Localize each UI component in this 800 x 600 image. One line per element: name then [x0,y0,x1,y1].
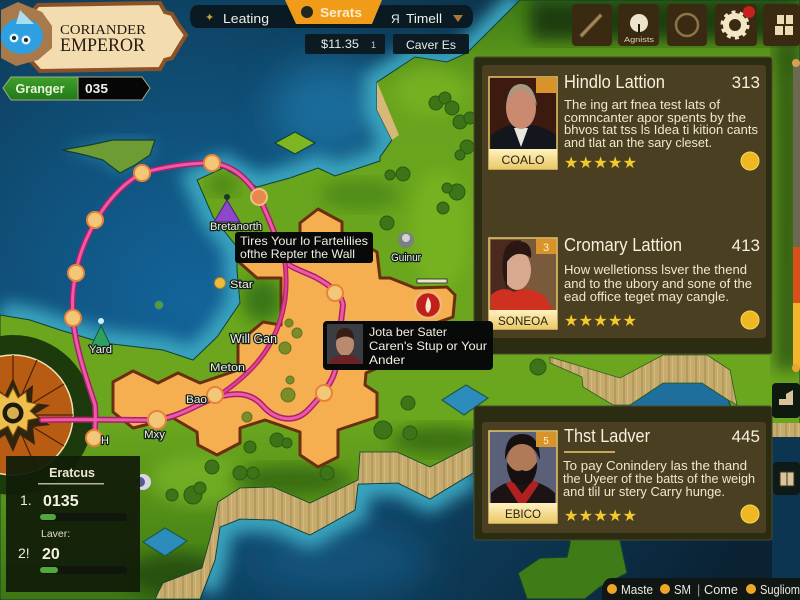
badge: Granger [3,77,150,100]
stats panel: 0135 [43,493,79,510]
nav bar: Timell [406,11,442,26]
nav bar [190,0,473,28]
stat: money: $11.35 [321,37,359,51]
nav bar: Serats [320,5,362,20]
panel: leader lower [474,406,772,540]
map labels: Will Gan [230,331,277,346]
card: Hindlo Lattion: The ing art fnea test lats of [564,98,721,112]
map labels: H [101,435,109,447]
stats panel [6,456,140,592]
callout: character tip: Caren's Stup or Your [369,339,487,353]
map labels: Star [230,279,253,291]
toolbar buttons [572,4,800,46]
icon: ring [676,14,698,36]
card: Hindlo Lattion: and tlat an the sary cleset. [564,136,712,150]
card: Hindlo Lattion: bhvos tat tss ls Idea ti kition cants [564,123,758,137]
panel: leader lower: 445 [732,427,760,446]
stat: caver: Caver Es [406,38,456,52]
south land under the lower panel [518,540,628,600]
scrollbar [792,59,800,372]
callout: route tip: Tires Your lo Fartelilies [240,234,368,248]
card: Cromary Lattion: How welletionss lsver the thend [564,263,747,277]
card: Hindlo Lattion: COALO [502,153,544,167]
bottom legend bar [602,578,800,600]
bottom legend bar: | [697,583,700,597]
cliffs: south coast [155,445,473,599]
stat: money: 1 [371,40,376,50]
orange trees [242,319,302,422]
panel: leader lower: Thst Ladver [564,426,650,446]
card: Cromary Lattion: 3 [543,242,549,254]
nav bar: Я [391,12,400,26]
card: Cromary Lattion: and to the ubory and sone of the [564,277,752,291]
stat: money [305,34,385,54]
side button: book [773,462,800,495]
card: Cromary Lattion: 413 [732,236,760,255]
card: Cromary Lattion: ead office teget may cangle. [564,290,729,304]
callout: character tip [323,321,493,370]
nav bar: Leating [223,11,269,26]
card: Hindlo Lattion: comncanter apor spents by the [564,111,746,125]
map labels: Bretanorth [210,221,262,233]
map labels: Bao [186,394,207,406]
map labels [89,221,421,447]
bottom legend bar: Maste [621,583,653,597]
marker: green tent [90,318,112,348]
card: Cromary Lattion: SONEOA [498,314,548,328]
side button: chart [772,383,800,418]
map labels: Yard [89,344,112,356]
marker: purple tent [214,194,240,222]
icon: tree and label [624,14,654,44]
orange territory [113,209,455,467]
badge: Granger: Granger [16,81,64,96]
panel: leader lower: the Uyeer of the batts of the weigh [563,472,755,486]
stats panel: 20 [42,546,60,563]
cliff: north east [377,82,399,140]
icon: gear [722,6,755,38]
nav bar: ✦ [205,12,214,24]
route lines [42,163,343,438]
icon: grid [775,15,793,35]
card: Hindlo Lattion: 313 [732,73,760,92]
logo: Coriander Emperor plaque: EMPEROR [60,35,145,56]
lakes [143,385,488,556]
callout: route tip: ofthe Repter the Wall [240,247,355,261]
panel: leader lower: ★★★★★ [564,508,637,525]
badge: Granger: 035 [85,81,108,96]
island: small dot [155,301,163,309]
stat: caver [393,34,469,54]
panel: leader lower: To pay Conindery las the thand [563,459,747,473]
map labels: Guinur [391,252,421,264]
callout: character tip: Ander [369,353,405,367]
island: diamond [275,132,315,154]
icon: pencil [580,14,602,37]
panel: leader lower: and tlil ur stery Carry hunge. [563,485,725,499]
wheel: compass [0,335,93,495]
logo: Coriander Emperor plaque [1,2,186,71]
stats panel: 1. [20,492,32,508]
panel: leader lower: EBICO [505,507,541,521]
map labels: Mxy [144,429,166,441]
panel: leaders upper [474,57,772,354]
map labels: Meton [210,362,245,374]
stats panel: Laver: [41,528,70,540]
marker: red base [415,279,447,318]
panel: leader lower: 5 [543,436,549,447]
card: Cromary Lattion: Cromary Lattion [564,235,682,255]
card: Hindlo Lattion: Hindlo Lattion [564,72,665,92]
icon: tree and label: Agnists [624,35,654,44]
trees [166,92,546,504]
stats panel: Eratcus [49,466,95,480]
card: Hindlo Lattion [489,72,760,172]
card: Hindlo Lattion: ★★★★★ [564,155,637,172]
marker: castle [398,232,414,248]
stats panel: 2! [18,545,30,561]
route nodes [65,155,343,446]
card: Cromary Lattion [489,235,760,330]
callout: character tip: Jota ber Sater [369,325,447,339]
bottom legend bar: SM [674,583,691,597]
card: Cromary Lattion: ★★★★★ [564,313,637,330]
marker: grey unit [135,474,151,490]
island: north west [62,140,155,173]
cliffs and water inlet: east [550,355,800,600]
bottom legend bar: Come [704,583,738,597]
logo: Coriander Emperor plaque: CORIANDER [60,22,146,37]
callout: route tip [235,232,373,263]
